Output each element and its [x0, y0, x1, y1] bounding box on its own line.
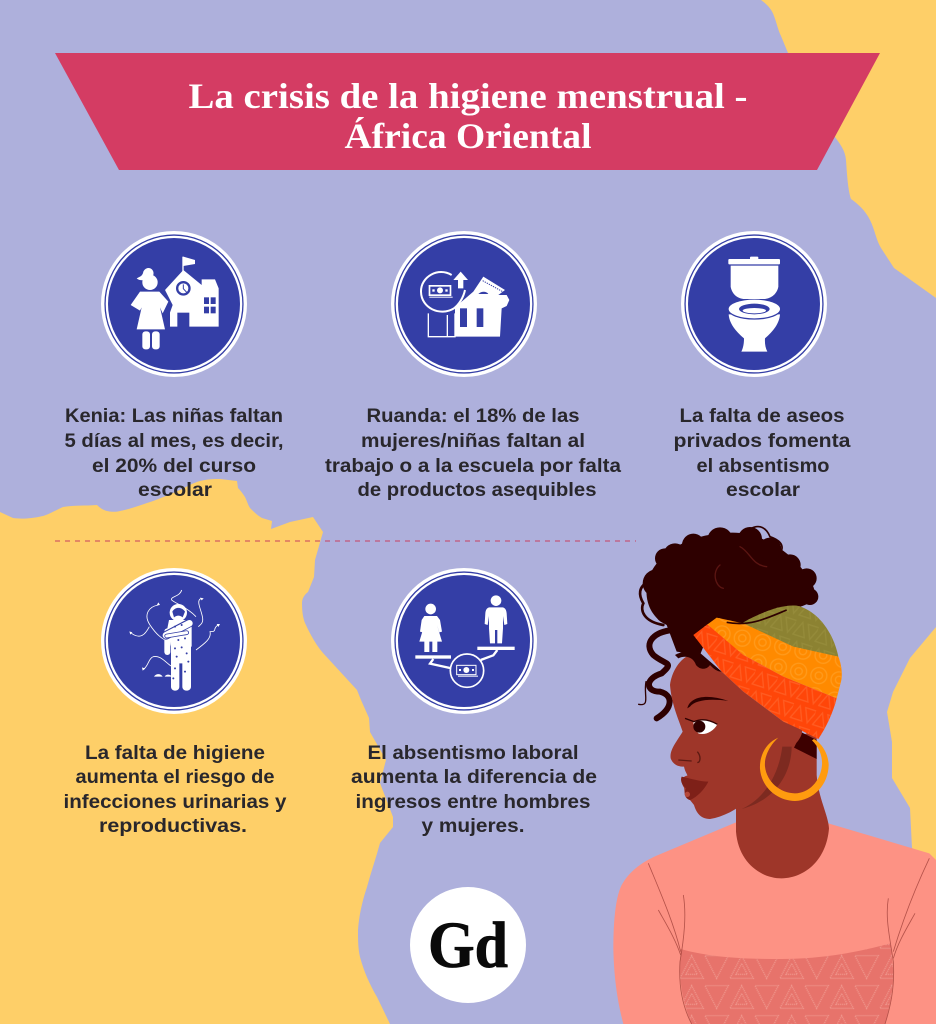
hair	[643, 527, 818, 655]
text: ingresos: ingresos entre hombres	[356, 792, 590, 813]
logo: Gd	[410, 887, 526, 1003]
shirt patterned band	[680, 943, 893, 1024]
shirt creases	[648, 858, 929, 1024]
background: yellow right shape	[887, 627, 936, 862]
text: ingresos	[351, 743, 597, 837]
lips	[681, 777, 708, 800]
text: ingresos: El absentismo laboral	[368, 743, 578, 764]
text: aseos	[674, 406, 851, 501]
text: aseos: La falta de aseos	[680, 406, 844, 427]
text: aseos: escolar	[726, 480, 801, 501]
text: Kenia	[64, 406, 284, 501]
earring	[760, 738, 829, 801]
text: infecciones: La falta de higiene	[85, 743, 265, 764]
text: aseos: privados fomenta	[674, 431, 851, 452]
icon: person with infections	[101, 568, 247, 714]
headwrap	[693, 606, 842, 739]
face	[670, 655, 802, 819]
title	[188, 76, 748, 156]
text: ingresos: aumenta la diferencia de	[351, 767, 597, 788]
text: Kenia: escolar	[138, 480, 213, 501]
icon: income scale	[391, 568, 537, 714]
text: ingresos: y mujeres.	[422, 816, 524, 837]
shirt	[613, 822, 936, 1024]
text: Kenia: Kenia: Las niñas faltan	[65, 406, 283, 427]
background: yellow lower-left shape	[0, 479, 393, 1024]
text: infecciones: aumenta el riesgo de	[76, 767, 274, 788]
text: Ruanda: de productos asequibles	[358, 480, 596, 501]
icon: toilet	[681, 231, 827, 377]
logo: Gd: Gd	[428, 909, 508, 982]
text: Ruanda: mujeres/niñas faltan al	[361, 431, 585, 452]
title: África Oriental	[344, 116, 592, 156]
eyebrow	[687, 697, 728, 708]
text: infecciones: reproductivas.	[99, 816, 247, 837]
dashed divider	[55, 540, 636, 542]
banner: title ribbon	[55, 53, 880, 170]
neck wrap shadow	[794, 732, 817, 759]
title: La crisis de la higiene menstrual -	[188, 76, 748, 116]
text: aseos: el absentismo	[696, 456, 830, 477]
icon: girl and school	[101, 231, 247, 377]
jaw shadow	[742, 747, 792, 809]
icon: money and house costs	[391, 231, 537, 377]
text: Kenia: el 20% del curso	[92, 456, 256, 477]
text: Kenia: 5 días al mes, es decir,	[64, 431, 284, 452]
eye	[685, 718, 717, 734]
text: Ruanda	[325, 406, 621, 501]
curls	[639, 527, 782, 718]
text: Ruanda: Ruanda: el 18% de las	[366, 406, 580, 427]
text: infecciones	[64, 743, 287, 837]
neck	[736, 728, 829, 878]
fringe	[675, 650, 722, 672]
nose	[678, 752, 700, 762]
text: Ruanda: trabajo o a la escuela por falta	[325, 456, 621, 477]
background: yellow top-right shape	[761, 0, 936, 298]
text: infecciones: infecciones urinarias y	[64, 792, 287, 813]
illustration: woman with headwrap	[613, 527, 936, 1024]
